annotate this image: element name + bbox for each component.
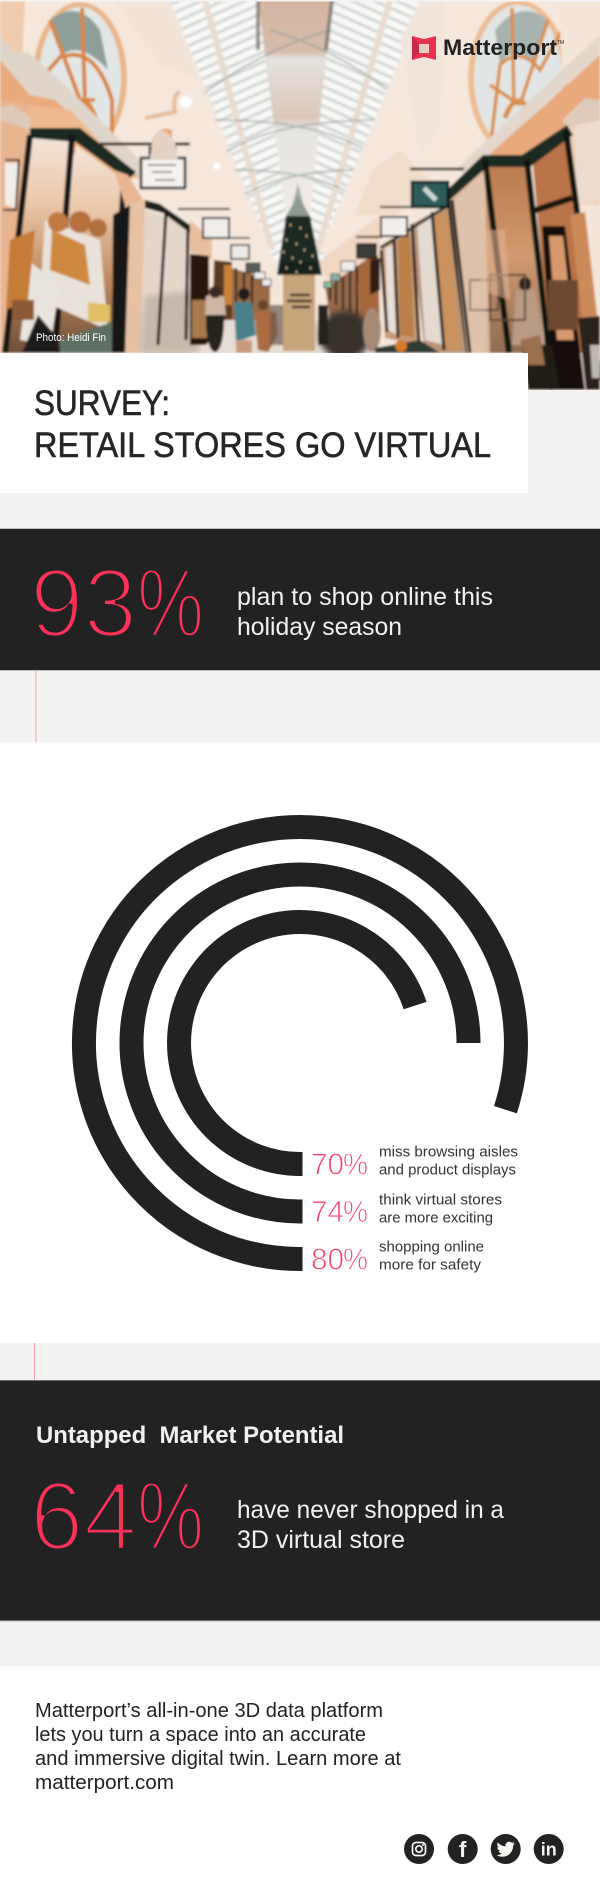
arc: 70% [179,922,415,1164]
footer text: and immersive digital twin. Learn more at [35,1748,401,1770]
chart label: 70%: miss browsing aisles [379,1144,518,1161]
connector line [35,671,37,743]
chart label: 80%: % [343,1242,368,1276]
arc: 80% [84,827,516,1259]
logo: Matterport: TM [557,40,564,46]
icon: Instagram [404,1834,434,1864]
stat description: holiday season [237,613,402,641]
right wall and arch window [320,0,600,262]
footer text [35,1700,401,1794]
chart label: 70%: and product displays [379,1162,516,1179]
chart label: 80% [311,1239,484,1276]
footer text: matterport.com [35,1772,174,1794]
icon: LinkedIn [534,1834,564,1864]
left store windows [3,128,136,353]
arc: 74% [131,874,468,1212]
stat number: 93%: 93 [30,548,137,658]
lamps [144,90,221,170]
photo: Christmas tree in a shopping arcade [0,0,600,395]
stat description: 3D virtual store [237,1526,405,1554]
left middle storefronts [112,170,270,353]
panel: title [0,353,528,493]
panel: 64% stat [0,1380,600,1622]
Christmas tree [277,183,322,275]
stat description [237,1496,504,1554]
right hanging signs [324,169,464,288]
top edge [0,0,600,2]
chart label: 74%: think virtual stores [379,1192,502,1209]
stat description: have never shopped in a [237,1496,504,1524]
icon: LinkedIn: in [541,1840,557,1860]
heading: Untapped Market Potential: Untapped Market Potential [36,1422,344,1449]
left hanging signs [100,144,271,286]
panel: title: SURVEY: [34,384,170,423]
floor, people and blur [200,286,440,359]
radial bar chart [84,827,516,1259]
right store windows [447,120,600,390]
left cornice [0,35,150,178]
stat number: 93%: % [137,548,204,658]
chart label: 74%: % [343,1194,368,1229]
logo: Matterport: Matterport [443,35,558,60]
chart label: 80%: more for safety [379,1257,481,1274]
chart label: 70% [311,1144,518,1182]
panel: 93% stat [0,528,600,671]
chart label: 74%: are more exciting [379,1210,493,1227]
right middle storefronts [318,205,466,353]
left arch window [34,2,128,134]
stat number: 64%: % [137,1462,204,1570]
chart label: 74% [311,1192,502,1229]
panel: title: RETAIL STORES GO VIRTUAL [34,426,491,465]
chart label: 80%: 80 [311,1242,344,1276]
chart label: 70%: 70 [311,1146,344,1182]
panel: footer [0,1666,600,1900]
left wall [144,50,246,202]
skylight [170,2,420,262]
icon: Facebook: f [459,1837,467,1862]
chart label: 80%: shopping online [379,1239,484,1256]
photo credit: Photo: Heidi Fin [36,332,106,344]
chart label: 74%: 74 [311,1194,344,1229]
icon: Facebook [448,1834,478,1864]
panel: radial chart [0,742,600,1343]
icon: Matterport mark [412,36,436,60]
chart label: 70%: % [343,1146,368,1182]
stat number: 64%: 64 [30,1462,137,1570]
icon: Twitter [491,1834,521,1864]
tree planter box [283,275,315,351]
stat description: plan to shop online this [237,583,493,611]
footer text: lets you turn a space into an accurate [35,1724,366,1746]
stat description [237,583,493,641]
connector line [34,1343,35,1381]
footer text: Matterport’s all-in-one 3D data platform [35,1700,383,1722]
